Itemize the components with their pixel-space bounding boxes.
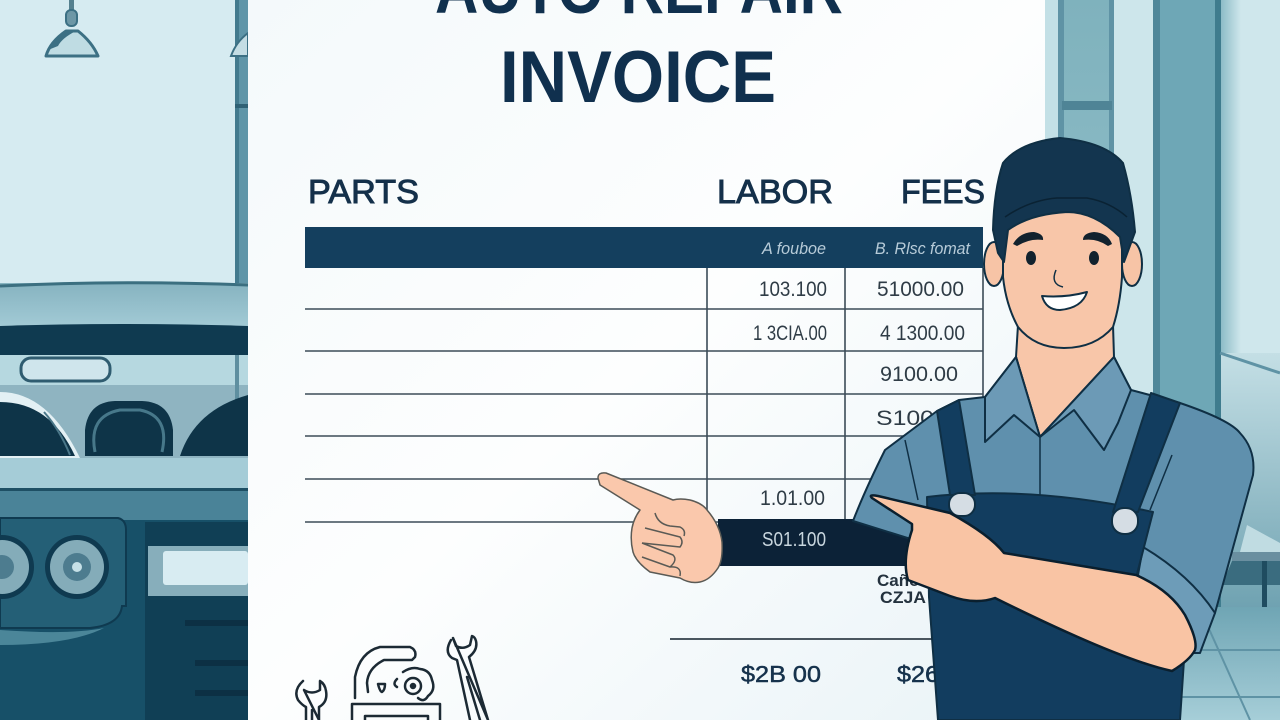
dash display <box>145 522 248 720</box>
gauges <box>0 535 109 599</box>
background: garage right side <box>1040 0 1280 720</box>
table values: 1.01.00 <box>760 487 825 510</box>
neck outline <box>1016 325 1114 437</box>
right sleeve cuff <box>1138 547 1215 653</box>
highlighted value: S01.100 <box>762 529 826 551</box>
nose <box>1054 270 1063 287</box>
right forearm and hand <box>871 495 1196 671</box>
cap brim crease <box>1005 198 1127 217</box>
table values: 1 3CIA.00 <box>753 322 827 345</box>
column headings: LABOR <box>717 173 833 210</box>
collar <box>985 357 1131 450</box>
garbled note <box>877 571 930 607</box>
smile <box>1042 292 1087 310</box>
table header labels: A fouboe <box>761 239 826 258</box>
mechanic character <box>598 138 1253 720</box>
table header labels <box>761 239 971 258</box>
table values: 103.100 <box>759 278 827 301</box>
invoice table <box>305 227 983 687</box>
left hand fingers <box>642 513 684 576</box>
rear-view mirror <box>21 358 110 381</box>
face <box>1003 205 1122 348</box>
column headings <box>308 173 985 210</box>
ears <box>984 242 1004 286</box>
head group <box>984 138 1142 348</box>
table values: S100 <box>876 407 934 430</box>
table header bar <box>305 227 983 268</box>
garbled note: Cañoa <box>877 571 930 590</box>
table values: 4 1300.00 <box>880 322 965 345</box>
dashboard <box>0 458 248 488</box>
seats <box>0 392 248 458</box>
background: garage left wall <box>0 0 250 290</box>
icon: small wrench <box>296 681 326 720</box>
icon: tools <box>296 636 488 720</box>
icon: hanging lamp <box>46 0 98 56</box>
highlighted total bar <box>718 519 916 566</box>
shirt <box>853 357 1253 613</box>
title <box>435 0 843 118</box>
apron <box>927 493 1184 720</box>
column headings: FEES <box>901 173 985 210</box>
table header labels: B. Rlsc fomat <box>875 239 971 258</box>
title: INVOICE <box>500 37 776 118</box>
table values: 9100.00 <box>880 363 958 386</box>
totals <box>741 661 939 687</box>
buckles <box>949 493 1138 534</box>
table values <box>753 278 965 510</box>
straps <box>937 393 1180 512</box>
eyebrows <box>1013 232 1043 246</box>
icon: large wrench <box>448 636 488 720</box>
icon: engine gear <box>352 647 440 720</box>
garbled note: CZJA <box>880 588 926 607</box>
total line <box>670 638 936 640</box>
roof header bar <box>0 324 248 355</box>
eyes <box>1026 251 1036 265</box>
column headings: PARTS <box>308 173 419 210</box>
invoice paper <box>248 0 1045 720</box>
neck <box>1016 320 1114 437</box>
left hand pointing <box>598 473 722 582</box>
cap <box>993 138 1135 262</box>
bench <box>1222 525 1280 607</box>
background: car interior <box>0 283 248 720</box>
floor <box>1180 607 1280 720</box>
totals: $2B 00 <box>741 661 821 687</box>
table values: 51000.00 <box>877 278 964 301</box>
totals: $26 <box>897 661 939 687</box>
